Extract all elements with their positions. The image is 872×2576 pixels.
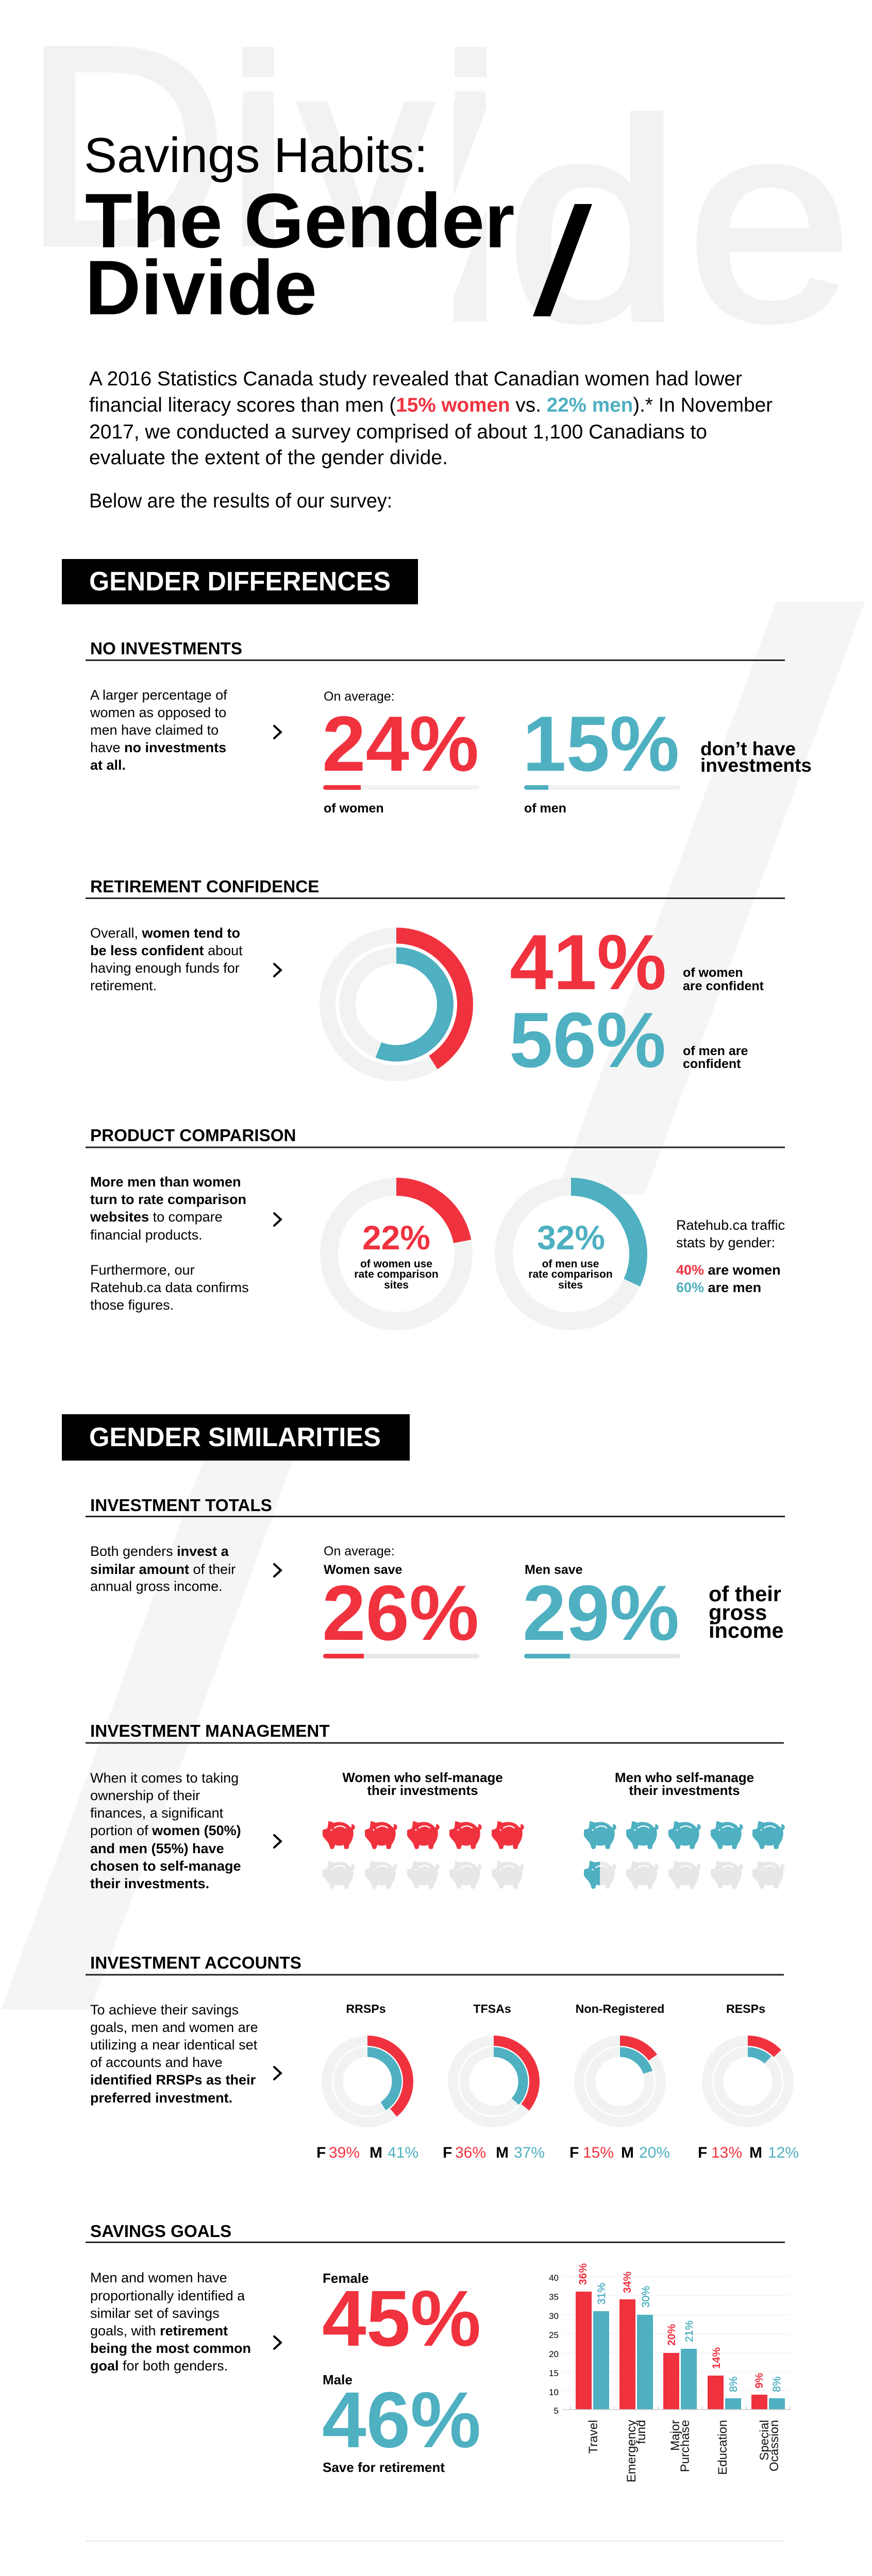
donut: men 32%: [504, 1187, 638, 1321]
donut: RESPs: 13%: [711, 2144, 742, 2161]
donut: Non-Registered: M: [621, 2144, 634, 2161]
donut: RRSPs: RRSPs: [346, 2002, 386, 2015]
bar chart: Purchase: [678, 2420, 692, 2472]
bar chart: 36%: [577, 2263, 589, 2285]
pictogram: men: their investments: [629, 1783, 740, 1798]
traffic stats: Ratehub.ca traffic: [676, 1217, 785, 1233]
stat: men: Men save: [525, 1563, 583, 1577]
panel: no investments: women as opposed to: [90, 705, 226, 720]
arrow: [274, 726, 281, 738]
panel: no investments: have no investments: [90, 740, 226, 755]
donut: Non-Registered: F: [569, 2144, 579, 2161]
bar chart: 8%: [771, 2377, 783, 2392]
panel: savings goals: being the most common: [90, 2341, 251, 2356]
panel: product comparison: websites to compare: [90, 1209, 223, 1225]
donut: men 32%: 32%: [537, 1218, 605, 1257]
intro paragraph: evaluate the extent of the gender divide.: [89, 447, 448, 469]
bar chart: 15: [549, 2368, 559, 2378]
donut: RESPs: [698, 2002, 799, 2161]
panel: investment management: ownership of their: [90, 1788, 200, 1803]
banner: gender differences: GENDER DIFFERENCES: [89, 567, 391, 597]
traffic stats: stats by gender:: [676, 1235, 775, 1250]
heading: INVESTMENT TOTALS: [90, 1496, 272, 1515]
text block: Both genders invest a: [90, 1544, 229, 1559]
panel: investment accounts: utilizing a near identical set: [90, 2037, 258, 2053]
donut: TFSAs: [443, 2002, 545, 2161]
donut: RESPs: 12%: [768, 2144, 799, 2161]
donut: women 22%: sites: [384, 1279, 409, 1291]
bar chart: 10: [549, 2387, 559, 2397]
title: The Gender: [85, 177, 514, 264]
donut: TFSAs: M: [496, 2144, 509, 2161]
donut: RRSPs: 39%: [329, 2144, 360, 2161]
stat: men: of men: [524, 801, 566, 816]
arrow: [274, 1564, 281, 1577]
bar chart: 21%: [683, 2320, 695, 2342]
stat: women: 26%: [322, 1569, 479, 1657]
donut: women 22%: [329, 1187, 464, 1321]
donut: Non-Registered: [569, 2002, 670, 2161]
donut chart: [328, 936, 465, 1073]
icon: black slash: [533, 204, 592, 316]
intro paragraph: A 2016 Statistics Canada study revealed that Canadian women had lower: [89, 368, 742, 390]
heading: INVESTMENT MANAGEMENT: [90, 1722, 330, 1741]
panel: product comparison: [86, 1126, 785, 1321]
traffic stats: 40% are women: [676, 1262, 781, 1278]
bar chart: 9%: [753, 2372, 765, 2388]
background diagonal slash: similarities: [1, 1437, 301, 2010]
pictogram: men: [584, 1770, 785, 1889]
text block: More men than women: [90, 1174, 241, 1190]
panel: no investments: On average:: [324, 689, 395, 704]
stat: women: 24%: [322, 700, 479, 788]
intro paragraph: financial literacy scores than men (15% women vs. 22% men).* In November: [89, 394, 773, 416]
panel: investment management: their investments.: [90, 1876, 209, 1891]
panel: investment accounts: [86, 1954, 799, 2161]
panel: investment totals: [86, 1496, 785, 1658]
background word: Divide: d: [506, 62, 682, 380]
panel: product comparison: Furthermore, our: [90, 1262, 195, 1278]
arrow: [274, 1835, 281, 1848]
bar chart: 8%: [728, 2377, 740, 2392]
text block: A larger percentage of: [90, 687, 227, 703]
bar chart: Major: [668, 2420, 682, 2451]
donut: RESPs: RESPs: [726, 2002, 765, 2015]
donut: women 22%: rate comparison: [354, 1268, 439, 1280]
donut: TFSAs: 36%: [455, 2144, 486, 2161]
panel: no investments: men have claimed to: [90, 722, 219, 738]
bar chart: 20: [549, 2349, 559, 2359]
stat: male: Male: [323, 2372, 353, 2387]
panel: investment accounts: goals, men and women are: [90, 2020, 258, 2035]
bar chart: 20%: [666, 2324, 678, 2346]
donut: RRSPs: F: [316, 2144, 326, 2161]
banner: gender similarities: [62, 1414, 410, 1461]
panel: investment management: portion of women (50%): [90, 1823, 241, 1838]
divider: [86, 2540, 785, 2542]
panel: savings goals: proportionally identified a: [90, 2288, 245, 2303]
panel: savings goals: goals, with retirement: [90, 2323, 228, 2338]
pictogram: women: Women who self-manage: [342, 1770, 503, 1785]
panel: investment management: finances, a significant: [90, 1805, 224, 1821]
panel: product comparison: turn to rate comparison: [90, 1192, 246, 1207]
donut: TFSAs: 37%: [514, 2144, 545, 2161]
arrow: [274, 2067, 281, 2079]
donut: women 22%: of women use: [360, 1258, 432, 1270]
bar chart: Education: [716, 2420, 730, 2475]
donut: TFSAs: TFSAs: [473, 2002, 511, 2015]
arrow: [274, 964, 281, 976]
heading: NO INVESTMENTS: [90, 639, 242, 658]
bar chart: 34%: [622, 2272, 633, 2293]
panel: investment totals: annual gross income.: [90, 1579, 223, 1594]
caption: income: [709, 1618, 784, 1642]
panel: investment management: chosen to self-manage: [90, 1858, 241, 1874]
stat: female: 45%: [322, 2274, 481, 2363]
panel: investment totals: similar amount of their: [90, 1562, 236, 1577]
traffic stats: 60% are men: [676, 1280, 761, 1295]
panel: investment management: and men (55%) have: [90, 1841, 224, 1856]
stat: women: 41%: [510, 919, 666, 1006]
donut: RESPs: F: [698, 2144, 707, 2161]
donut: men 32%: of men use: [542, 1258, 599, 1270]
stat: female: Female: [323, 2270, 369, 2286]
heading: SAVINGS GOALS: [90, 2222, 231, 2241]
panel: savings goals: [86, 2222, 791, 2482]
caption: [709, 1582, 784, 1642]
pictogram: women: their investments: [367, 1783, 478, 1798]
stat: men: 29%: [523, 1569, 679, 1657]
panel: product comparison: Ratehub.ca data confirms: [90, 1280, 249, 1295]
stat: men: of men are: [683, 1044, 748, 1058]
donut: RRSPs: [316, 2002, 418, 2161]
text block: Overall, women tend to: [90, 925, 240, 941]
heading: INVESTMENT ACCOUNTS: [90, 1954, 301, 1973]
panel: savings goals: similar set of savings: [90, 2306, 220, 2321]
donut: men 32%: rate comparison: [528, 1268, 613, 1280]
panel: retirement confidence: having enough funds for: [90, 960, 240, 976]
traffic stats: [676, 1217, 785, 1295]
background word: Divide: e: [686, 62, 852, 380]
donut: Non-Registered: 15%: [583, 2144, 614, 2161]
stat: male: 46%: [322, 2376, 481, 2464]
heading: PRODUCT COMPARISON: [90, 1126, 296, 1145]
donut: Non-Registered: 20%: [639, 2144, 670, 2161]
panel: investment accounts: preferred investment.: [90, 2090, 232, 2106]
text block: When it comes to taking: [90, 1770, 239, 1786]
panel: investment accounts: identified RRSPs as their: [90, 2072, 256, 2088]
intro paragraph: [89, 368, 773, 512]
panel: product comparison: financial products.: [90, 1227, 203, 1243]
text block: To achieve their savings: [90, 2002, 239, 2018]
stat: men: 56%: [509, 996, 666, 1084]
title: [84, 128, 514, 331]
bar chart: 25: [549, 2330, 559, 2340]
donut: RRSPs: 41%: [388, 2144, 418, 2161]
text block: Men and women have: [90, 2270, 227, 2285]
donut: RRSPs: M: [370, 2144, 382, 2161]
title: Savings Habits:: [84, 128, 428, 183]
bar chart: 5: [554, 2406, 559, 2416]
banner: gender differences: [62, 559, 418, 604]
bar chart: 40: [549, 2273, 559, 2283]
stat: men: 15%: [523, 700, 679, 788]
bar chart: 31%: [596, 2283, 608, 2304]
caption: of their: [709, 1582, 781, 1606]
stat: women: Women save: [324, 1563, 402, 1577]
panel: product comparison: those figures.: [90, 1297, 174, 1313]
donut: Non-Registered: Non-Registered: [576, 2002, 664, 2015]
background diagonal slash: differences: [556, 602, 865, 1194]
panel: investment totals: On average:: [324, 1544, 395, 1558]
arrow: [274, 2336, 281, 2349]
pictogram: women: [323, 1770, 524, 1889]
banner: gender similarities: GENDER SIMILARITIES: [89, 1422, 381, 1452]
stat: male: Save for retirement: [323, 2460, 445, 2475]
bar chart: Ocassion: [767, 2420, 781, 2471]
panel: no investments: at all.: [90, 757, 126, 773]
panel: savings goals: goal for both genders.: [90, 2358, 228, 2374]
stat: women: of women: [683, 965, 743, 980]
bar chart: [549, 2263, 791, 2482]
bar chart: 14%: [711, 2347, 723, 2369]
bar chart: 30: [549, 2311, 559, 2321]
panel: retirement confidence: [86, 877, 785, 1084]
arrow: [274, 1213, 281, 1226]
panel: investment management: [86, 1722, 785, 1891]
title: Divide: [85, 244, 317, 331]
bar chart: 30%: [640, 2286, 652, 2308]
caption: don’t have: [700, 738, 796, 759]
donut: women 22%: 22%: [362, 1218, 430, 1257]
stat: men: [509, 996, 748, 1084]
donut: RESPs: M: [749, 2144, 762, 2161]
heading: RETIREMENT CONFIDENCE: [90, 877, 319, 896]
stat: women: of women: [324, 801, 384, 816]
bar chart: Special: [758, 2420, 772, 2461]
stat: men: confident: [683, 1057, 741, 1071]
stat: women: [510, 919, 764, 1006]
panel: retirement confidence: retirement.: [90, 978, 157, 993]
intro paragraph: 2017, we conducted a survey comprised of about 1,100 Canadians to: [89, 421, 707, 443]
pictogram: men: Men who self-manage: [615, 1770, 754, 1785]
intro paragraph: Below are the results of our survey:: [89, 490, 392, 512]
bar chart: 35: [549, 2292, 559, 2302]
panel: no investments: [86, 639, 812, 816]
caption: gross: [709, 1600, 767, 1624]
bar chart: Emergency: [625, 2420, 639, 2482]
panel: retirement confidence: be less confident about: [90, 943, 243, 958]
bar chart: fund: [634, 2420, 648, 2444]
stat: women: are confident: [683, 979, 764, 993]
panel: no investments: investments: [700, 755, 812, 776]
bar chart: Travel: [586, 2420, 600, 2454]
donut: men 32%: sites: [558, 1279, 583, 1291]
background word: Divide: [23, 0, 852, 380]
donut: TFSAs: F: [443, 2144, 452, 2161]
panel: investment accounts: of accounts and have: [90, 2055, 223, 2070]
